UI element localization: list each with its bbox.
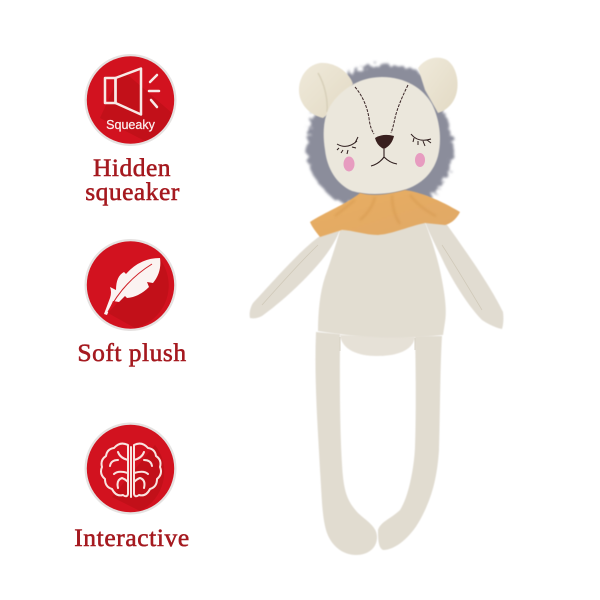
orange ruff collar xyxy=(310,190,460,237)
nose xyxy=(375,135,394,149)
arm and belly seams xyxy=(262,245,482,351)
mouth xyxy=(371,149,397,166)
panel: hidden squeaker feature xyxy=(84,54,180,206)
illustration: plush lion toy xyxy=(250,58,503,555)
closed eyes xyxy=(337,134,431,154)
left ear fold xyxy=(318,73,327,112)
left leg xyxy=(315,332,377,555)
torso xyxy=(318,222,446,338)
heading: soft plush: Soft plush xyxy=(77,338,187,367)
heading: hidden: Hidden xyxy=(93,153,171,182)
pink cheeks xyxy=(344,156,354,172)
heading: interactive: Interactive xyxy=(74,523,190,552)
panel: soft plush feature xyxy=(77,239,187,367)
icon: squeaky speaker badge xyxy=(84,54,176,146)
left ear xyxy=(299,63,353,118)
right ear xyxy=(418,58,458,113)
mane xyxy=(307,64,454,205)
ruff folds xyxy=(335,195,436,224)
left arm xyxy=(250,230,340,318)
heading: squeaker: squeaker xyxy=(85,177,180,206)
icon: feather badge xyxy=(84,239,176,331)
head seams xyxy=(355,85,408,134)
head xyxy=(324,77,440,194)
belly xyxy=(340,335,415,356)
icon: brain badge xyxy=(84,422,176,514)
right arm xyxy=(425,222,503,329)
right leg xyxy=(378,336,442,550)
icon label: Squeaky xyxy=(106,118,156,132)
panel: interactive feature xyxy=(74,422,190,552)
